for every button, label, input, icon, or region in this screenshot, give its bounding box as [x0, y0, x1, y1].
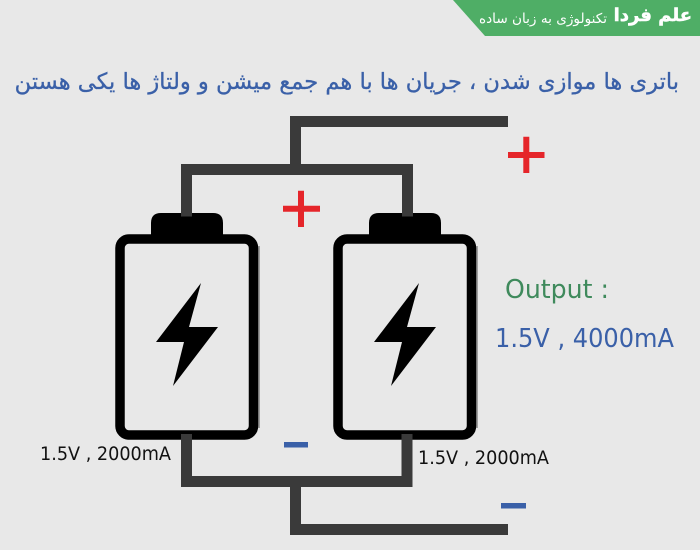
title: باتری ها موازی شدن ، جریان ها با هم جمع میشن و ولتاژ ها یکی هستن	[15, 69, 679, 95]
brand name: علم فردا	[614, 5, 692, 26]
label: output value: 1.5V , 4000mA	[495, 324, 674, 354]
label: right battery: 1.5V , 2000mA	[418, 447, 549, 469]
plus sign: output	[508, 137, 544, 173]
positive wiring	[186, 122, 508, 216]
label: output heading: Output :	[505, 275, 609, 305]
label: left battery: 1.5V , 2000mA	[40, 443, 171, 465]
battery: right	[338, 213, 477, 435]
negative wiring	[186, 434, 508, 530]
minus sign: middle	[284, 442, 308, 448]
banner background	[453, 0, 700, 36]
plus sign: middle	[283, 191, 320, 227]
battery: left	[120, 213, 259, 435]
minus sign: output	[501, 503, 526, 508]
brand tagline: تکنولوژی به زبان ساده	[479, 11, 607, 27]
